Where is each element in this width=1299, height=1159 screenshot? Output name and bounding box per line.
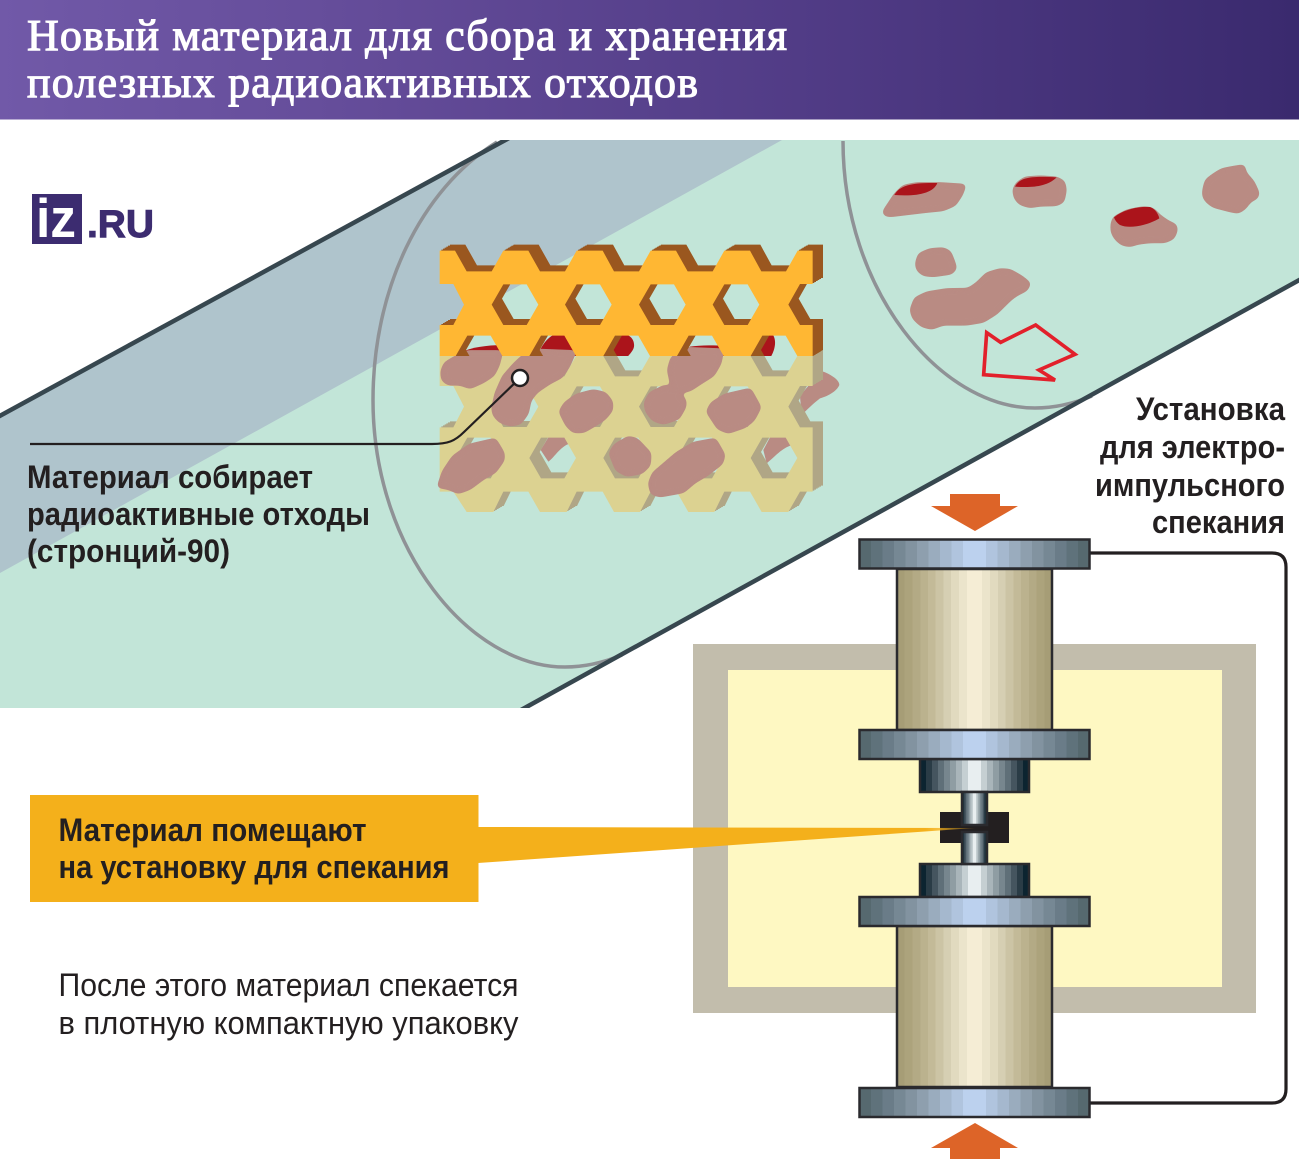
text: material collects: Материал собирает xyxy=(27,459,313,495)
lower plate, khaki xyxy=(440,350,823,512)
upper plate, orange xyxy=(440,244,823,356)
text: installation label: импульсного xyxy=(1095,467,1285,503)
furnace frame xyxy=(693,644,1256,1013)
callout: placed on the installation: Материал помещают xyxy=(58,812,366,848)
text: sintered into compact package: После этого материал спекается xyxy=(58,967,518,1003)
arrow: top pressure xyxy=(931,494,1018,531)
text: installation label: спекания xyxy=(1152,504,1285,540)
strontium deposits xyxy=(466,336,776,356)
title: Новый материал для сбора и хранения xyxy=(27,11,787,60)
leader line xyxy=(30,370,528,444)
porous material plate with captured waste xyxy=(438,245,839,512)
logo: iz.ru: .RU xyxy=(87,203,154,246)
title: полезных радиоактивных отходов xyxy=(27,58,698,107)
text: material collects: (стронций-90) xyxy=(27,533,230,569)
sintering press xyxy=(860,540,1090,1117)
arrow: bottom pressure xyxy=(931,1123,1018,1159)
text: material collects xyxy=(27,459,370,569)
waste over the plate xyxy=(438,348,760,496)
title xyxy=(27,11,787,107)
text: material collects: радиоактивные отходы xyxy=(27,496,370,532)
text: installation label: Установка xyxy=(1136,391,1285,427)
waste behind the plate xyxy=(541,372,839,463)
waste particles filtered out xyxy=(883,165,1259,380)
header banner xyxy=(0,0,1299,120)
arrow: flow direction xyxy=(984,325,1075,380)
text: sintered into compact package xyxy=(58,967,518,1041)
text: installation label xyxy=(1095,391,1285,540)
logo: iz.ru xyxy=(32,187,154,249)
logo: iz.ru: iz xyxy=(36,187,76,249)
text: sintered into compact package: в плотную компактную упаковку xyxy=(58,1005,518,1041)
text: installation label: для электро- xyxy=(1100,429,1285,465)
panel: diagonal tube xyxy=(0,138,1299,710)
callout: placed on the installation: на установку для спекания xyxy=(58,849,450,885)
wire xyxy=(1090,553,1286,1103)
callout: placed on the installation xyxy=(30,795,975,902)
